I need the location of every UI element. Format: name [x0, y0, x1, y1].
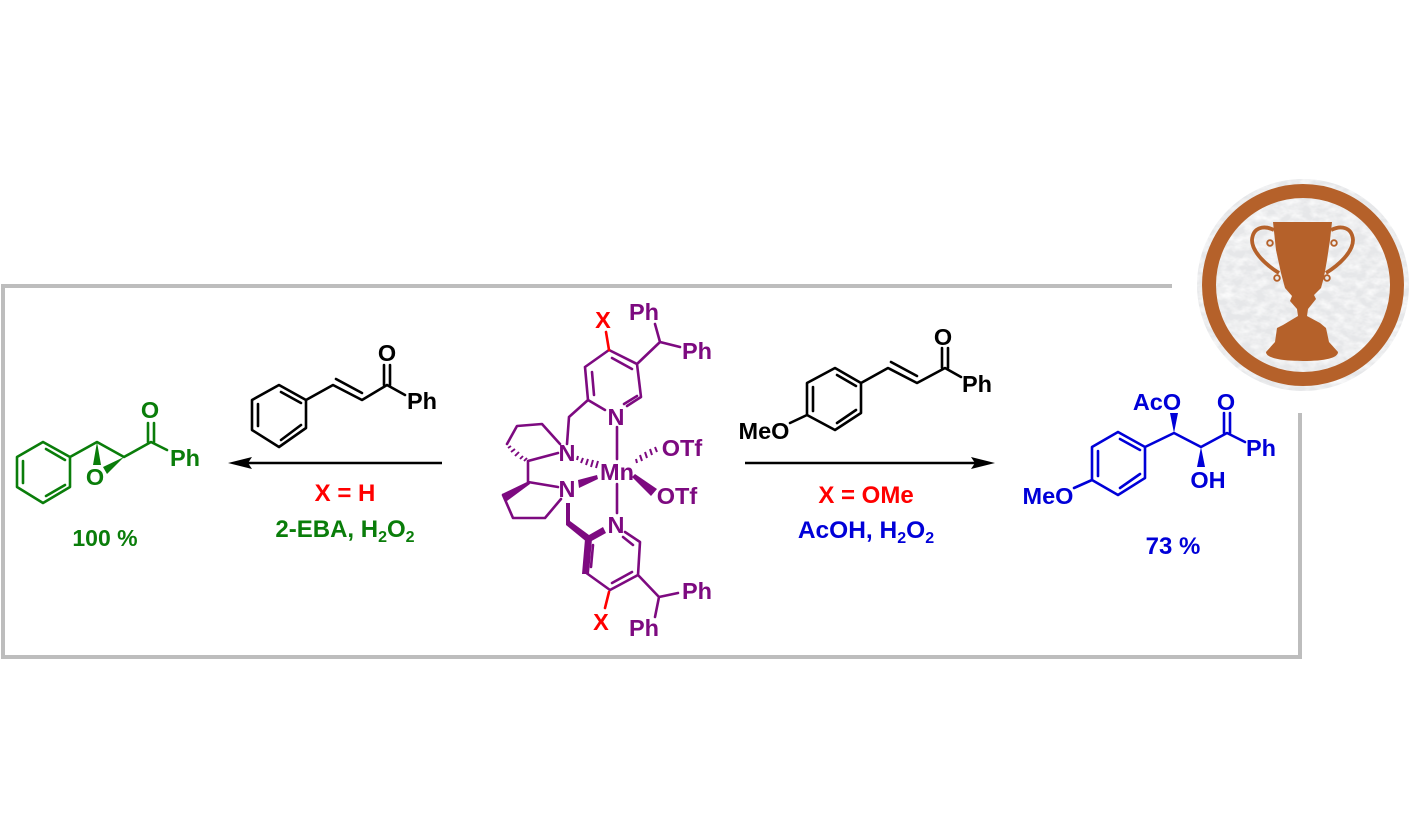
catalyst: Mn complex (purple): OTf [662, 435, 702, 461]
label: 2-EBA, H2O2: O [387, 516, 406, 543]
metal coordination bonds [616, 427, 618, 513]
upper pyridine ligand [567, 324, 680, 444]
catalyst: Mn complex (purple): Mn [600, 459, 634, 485]
label: AcOH, H2O2: 2 [925, 530, 934, 547]
substrate: methoxy chalcone (black): Ph [962, 371, 992, 397]
catalyst: Mn complex (purple): Ph [682, 338, 712, 364]
label: 2-EBA, H2O2: 2 [406, 529, 415, 546]
label: AcOH, H2O2: O [906, 517, 925, 544]
arrow: right to product [745, 457, 995, 469]
lower pyridine ligand [585, 532, 678, 617]
catalyst: Mn complex (purple): X [593, 609, 609, 635]
atom labels: N [608, 404, 624, 430]
catalyst: Mn complex (purple): Ph [682, 578, 712, 604]
substrate: chalcone (black): Ph [407, 388, 437, 414]
arrow: left to epoxide [228, 457, 442, 469]
catalyst: Mn complex (purple): Ph [629, 615, 659, 641]
product: acetoxy alcohol (blue): Ph [1246, 435, 1276, 461]
catalyst: Mn complex (purple): N [559, 440, 575, 466]
pyrrolidine rings [503, 424, 561, 518]
panel frame [3, 286, 1300, 657]
yield: 73 %: 73 % [1146, 533, 1200, 560]
label: 2-EBA, H2O2: 2 [378, 529, 387, 546]
product: acetoxy alcohol (blue): OH [1190, 467, 1226, 493]
catalyst: Mn complex (purple): OTf [657, 483, 697, 509]
label: X = OMe: X = OMe [818, 482, 914, 509]
product: acetoxy alcohol (blue): AcO [1133, 389, 1181, 415]
label: AcOH, H2O2: 2 [897, 530, 906, 547]
substrate: methoxy chalcone (black): MeO [739, 418, 789, 444]
product: acetoxy alcohol (blue): O [1217, 389, 1235, 415]
product: epoxide (green): O [141, 397, 159, 423]
product: acetoxy alcohol (blue): MeO [1023, 483, 1073, 509]
catalyst: Mn complex (purple) [502, 299, 712, 641]
product: epoxide (green): O [86, 464, 104, 490]
X substituents [605, 332, 609, 608]
catalyst: Mn complex (purple): N [608, 512, 624, 538]
label: X = H: X = H [315, 480, 375, 507]
product: epoxide (green) [17, 397, 200, 503]
product: acetoxy alcohol (blue) [1023, 389, 1276, 509]
substrate: chalcone (black): O [378, 340, 396, 366]
product: epoxide (green): Ph [170, 445, 200, 471]
icon: trophy badge [1197, 179, 1409, 391]
catalyst: Mn complex (purple): X [595, 307, 611, 333]
catalyst: Mn complex (purple): Ph [629, 299, 659, 325]
catalyst: Mn complex (purple): N [559, 476, 575, 502]
label: AcOH, H2O2: AcOH, H [798, 517, 897, 544]
substrate: chalcone (black) [252, 340, 437, 447]
substrate: methoxy chalcone (black): O [934, 324, 952, 350]
label: 2-EBA, H2O2: 2-EBA, H [275, 516, 378, 543]
yield: 100 %: 100 % [72, 525, 138, 551]
substrate: methoxy chalcone (black) [739, 324, 992, 444]
